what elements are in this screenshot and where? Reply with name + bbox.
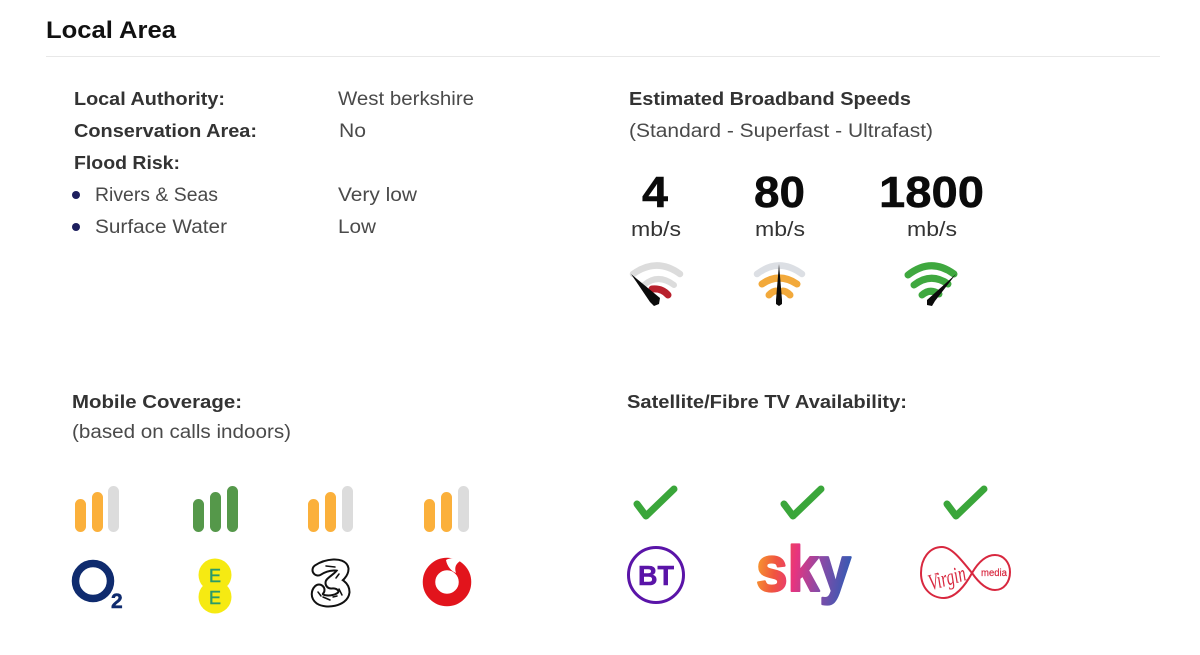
ultrafast speed: mb/s <box>907 219 957 241</box>
logo: Three <box>317 565 344 601</box>
mobile coverage note: (based on calls indoors) <box>72 422 291 443</box>
flood risk heading: Flood Risk: <box>74 152 180 173</box>
signal bars: O2 <box>75 486 119 532</box>
icon: check mark Virgin Media <box>947 489 984 516</box>
superfast speed <box>754 168 805 241</box>
panel: broadband speeds <box>629 88 984 306</box>
standard speed <box>631 168 681 241</box>
logo: Virgin Media <box>921 547 1010 598</box>
local authority row: West berkshire <box>338 89 474 110</box>
conservation area row: No <box>339 121 366 142</box>
surface water row <box>72 217 376 238</box>
local authority row <box>74 88 474 110</box>
surface water row: Surface Water <box>95 217 228 238</box>
logo: EE: E <box>209 566 221 586</box>
logo: Vodafone <box>429 558 465 600</box>
logo: Virgin Media: media <box>981 568 1007 579</box>
standard speed: 4 <box>642 168 669 217</box>
title: Local Area <box>46 17 177 44</box>
panel: TV availability <box>627 391 1010 605</box>
local authority row: Local Authority: <box>74 88 225 109</box>
signal bars: EE <box>193 486 238 532</box>
logo: EE <box>198 558 232 614</box>
signal bars: Three <box>308 486 353 532</box>
icon: red wifi gauge <box>631 266 680 306</box>
panel: mobile coverage <box>72 391 469 614</box>
standard speed: mb/s <box>631 219 681 241</box>
rivers and seas row: Very low <box>338 185 417 206</box>
logo: Sky: sky <box>756 533 851 605</box>
logo: BT <box>628 548 684 602</box>
ultrafast speed: 1800 <box>879 168 984 217</box>
rivers and seas row <box>72 185 417 206</box>
logo: O2 <box>76 564 123 613</box>
conservation area row <box>74 120 366 142</box>
logo: BT: BT <box>638 560 674 591</box>
icon: green wifi gauge <box>908 266 956 306</box>
superfast speed: mb/s <box>755 219 805 241</box>
panel: local authority details <box>72 88 474 238</box>
mobile coverage heading: Mobile Coverage: <box>72 391 242 412</box>
broadband subheading: (Standard - Superfast - Ultrafast) <box>629 121 933 142</box>
broadband heading: Estimated Broadband Speeds <box>629 88 911 109</box>
TV availability heading: Satellite/Fibre TV Availability: <box>627 391 907 412</box>
icon: amber wifi gauge <box>757 264 802 306</box>
logo: O2: 2 <box>111 590 123 613</box>
logo: Virgin Media: Virgin <box>925 561 969 595</box>
signal bars: Vodafone <box>424 486 469 532</box>
superfast speed: 80 <box>754 168 805 217</box>
icon: check mark BT <box>637 489 674 516</box>
ultrafast speed <box>879 168 984 241</box>
surface water row: Low <box>338 217 376 238</box>
rivers and seas row: Rivers & Seas <box>95 185 218 206</box>
logo: EE: E <box>209 588 221 608</box>
conservation area row: Conservation Area: <box>74 120 257 141</box>
icon: check mark Sky <box>784 489 821 516</box>
